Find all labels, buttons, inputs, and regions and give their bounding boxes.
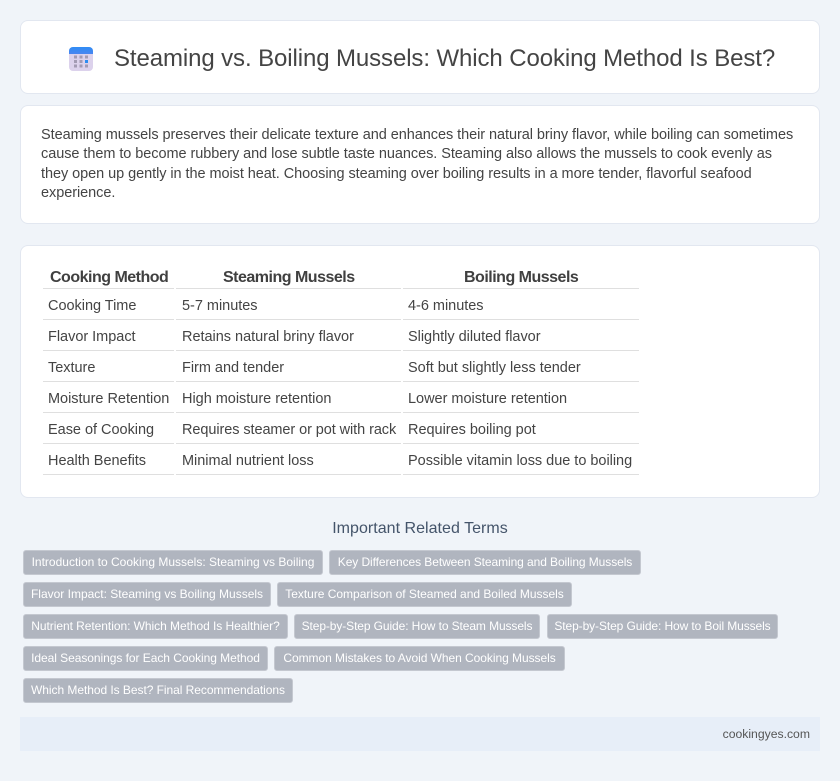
tag: Key Differences Between Steaming and Boiling Mussels [338,555,632,569]
row: moisture retention: Moisture Retention [48,391,169,407]
footer source text: cookingyes.com [723,727,810,741]
row: cooking time [48,298,484,314]
row: ease of cooking: Requires steamer or pot with rack [182,422,396,438]
tag [23,614,288,639]
intro paragraph [41,127,793,201]
row: flavor impact: Slightly diluted flavor [408,329,541,345]
tag [294,614,540,639]
footer bar [20,717,820,751]
row: health benefits: Minimal nutrient loss [182,453,314,469]
tag: Flavor Impact: Steaming vs Boiling Mussels [31,587,263,601]
row: ease of cooking: Ease of Cooking [48,422,154,438]
related terms tags [23,550,778,703]
row: health benefits: Possible vitamin loss due to boiling [408,453,632,469]
intro paragraph: they open up gently in the moist heat. Choosing steaming over boiling results in a more tender, flavorful seafood [41,166,752,182]
table header: Cooking Method [50,269,168,286]
tag [274,646,565,671]
related terms heading: Important Related Terms [332,520,508,537]
row: cooking time: Cooking Time [48,298,136,314]
row: texture: Firm and tender [182,360,284,376]
row: flavor impact: Flavor Impact [48,329,136,345]
row: texture: Soft but slightly less tender [408,360,581,376]
tag [277,582,572,607]
tag: Texture Comparison of Steamed and Boiled Mussels [285,587,564,601]
tag: Which Method Is Best? Final Recommendations [31,683,285,697]
title: Steaming vs. Boiling Mussels: Which Cooking Method Is Best? [114,45,775,72]
tag [23,678,293,703]
row: texture: Texture [48,360,95,376]
intro text panel [20,105,820,224]
table header [50,269,578,286]
row: moisture retention [48,391,567,407]
row: flavor impact [48,329,541,345]
table header: Steaming Mussels [223,269,355,286]
row: cooking time: 5-7 minutes [182,298,258,314]
row: health benefits: Health Benefits [48,453,146,469]
row: ease of cooking [48,422,536,438]
tag: Common Mistakes to Avoid When Cooking Mussels [283,651,556,665]
intro paragraph: cause them to become rubbery and lose subtle taste nuances. Steaming also allows the mussels to cook evenly as [41,146,772,162]
tag [23,550,323,575]
tag [23,646,268,671]
intro paragraph: Steaming mussels preserves their delicate texture and enhances their natural briny flavor, while boiling can sometimes [41,127,793,143]
comparison table [43,269,639,475]
icon: calendar [69,47,93,71]
row: ease of cooking: Requires boiling pot [408,422,536,438]
tag: Step-by-Step Guide: How to Steam Mussels [302,619,532,633]
tag: Ideal Seasonings for Each Cooking Method [31,651,260,665]
tag: Nutrient Retention: Which Method Is Healthier? [31,619,280,633]
comparison table panel [20,245,820,498]
tag: Step-by-Step Guide: How to Boil Mussels [554,619,771,633]
row: moisture retention: Lower moisture retention [408,391,567,407]
row: cooking time: 4-6 minutes [408,298,484,314]
row: flavor impact: Retains natural briny flavor [182,329,354,345]
row: texture [48,360,581,376]
tag: Introduction to Cooking Mussels: Steaming vs Boiling [32,555,314,569]
table header: Boiling Mussels [464,269,578,286]
header panel [20,20,820,94]
tag [547,614,778,639]
tag [23,582,271,607]
tag [329,550,641,575]
row: moisture retention: High moisture retention [182,391,331,407]
row: health benefits [48,453,632,469]
intro paragraph: experience. [41,185,115,201]
